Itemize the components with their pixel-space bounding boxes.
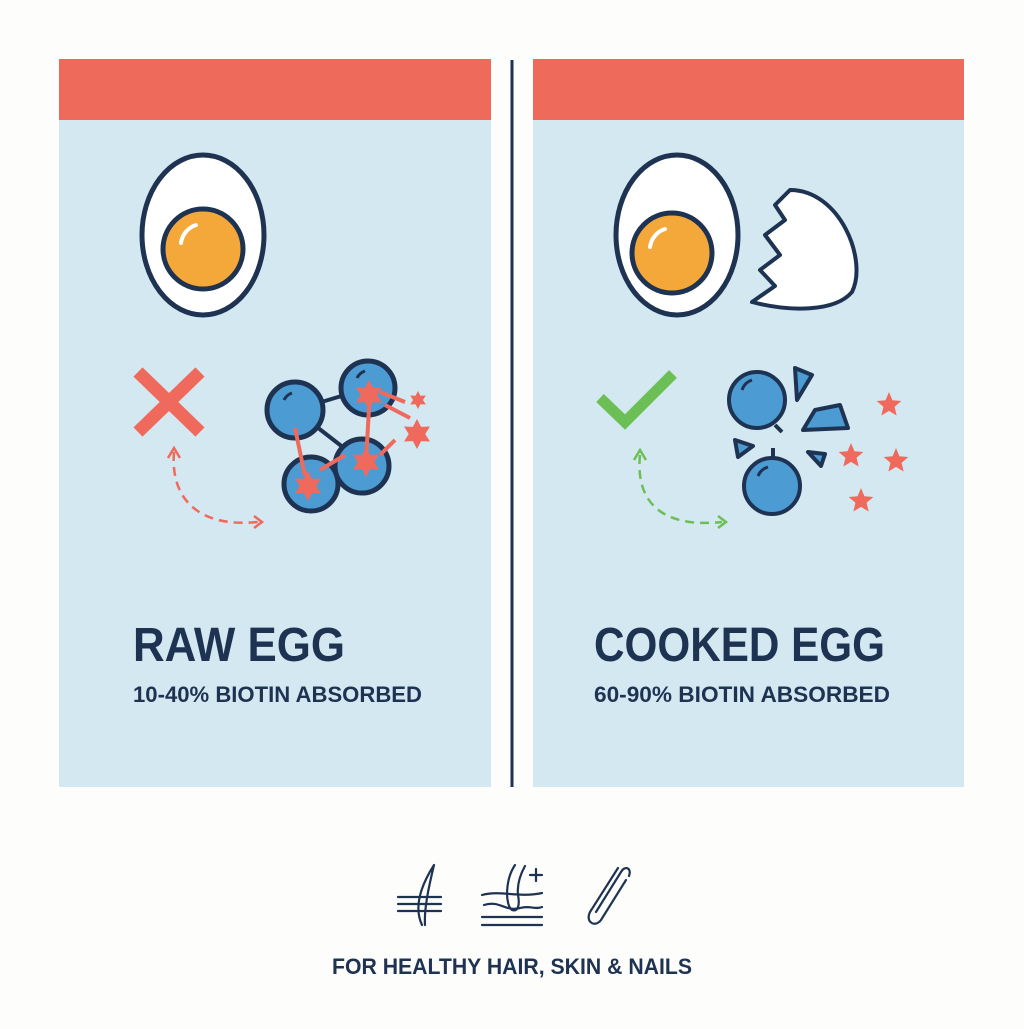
heading: cooked egg: COOKED EGG xyxy=(594,619,885,672)
arrow: red dashed xyxy=(174,452,258,523)
icons: hair skin nails xyxy=(398,865,630,925)
icon: check xyxy=(600,374,673,422)
header bar left xyxy=(59,59,491,120)
divider xyxy=(510,60,514,787)
subtitle raw: 10-40% BIOTIN ABSORBED xyxy=(133,682,422,707)
footer text: FOR HEALTHY HAIR, SKIN & NAILS xyxy=(332,954,692,979)
icon: raw egg xyxy=(142,155,264,315)
icon: broken molecule xyxy=(729,368,848,514)
header bar right xyxy=(533,59,964,120)
heading: raw egg: RAW EGG xyxy=(133,619,345,672)
panel: cooked egg xyxy=(533,59,964,787)
icon: eggshell xyxy=(752,190,857,309)
icon: cooked egg xyxy=(616,155,738,315)
icon: bound molecule xyxy=(267,361,430,511)
icon: red X xyxy=(138,372,200,432)
arrow: green dashed xyxy=(639,455,722,523)
panel: raw egg xyxy=(59,59,491,787)
subtitle cooked: 60-90% BIOTIN ABSORBED xyxy=(594,682,890,707)
